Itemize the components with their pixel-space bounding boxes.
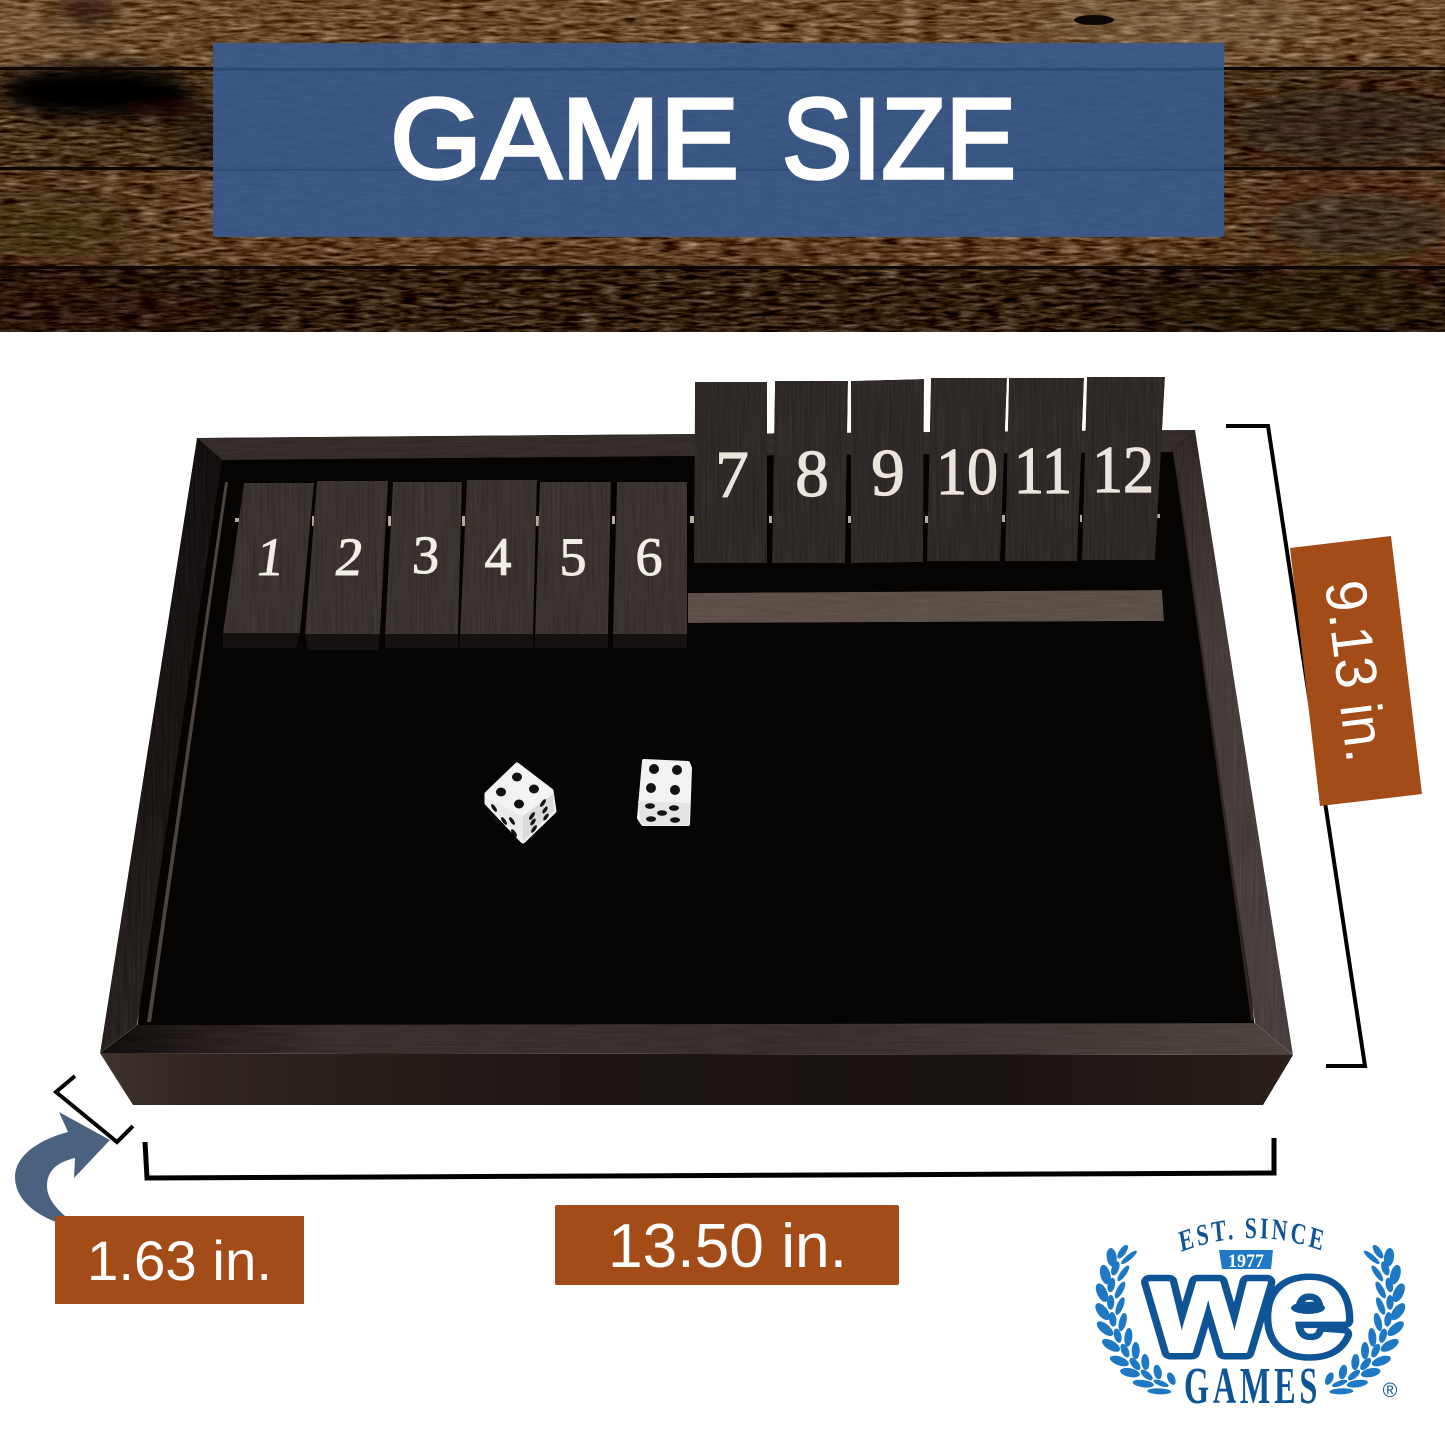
game board tray — [100, 430, 1293, 1105]
width dimension line — [145, 1138, 1274, 1178]
right rim — [1173, 430, 1293, 1055]
front rim top — [100, 1023, 1293, 1055]
burn mark — [0, 0, 225, 158]
logo registered mark: ® — [1383, 1380, 1398, 1402]
tile numbers: 2 — [332, 527, 367, 587]
label: width — [555, 1205, 899, 1285]
hinge pins — [235, 514, 1160, 526]
tile faces — [694, 377, 1165, 563]
wood plank header background — [0, 0, 1445, 332]
logo we mark: we — [1149, 1233, 1350, 1380]
front face — [100, 1053, 1293, 1105]
logo we mark: we — [1149, 1233, 1350, 1380]
tile numbers — [253, 525, 663, 587]
title banner — [213, 43, 1224, 237]
heading: SIZE — [782, 76, 1016, 203]
logo year ribbon — [1219, 1250, 1273, 1272]
tile numbers: 11 — [1014, 434, 1072, 508]
label: height — [1290, 536, 1422, 806]
inner wall highlights — [147, 482, 228, 1022]
label: height: 9.13 in. — [1312, 577, 1399, 765]
tile numbers: 6 — [636, 527, 662, 587]
label: width: 13.50 in. — [608, 1212, 847, 1281]
shelf bar — [688, 590, 1164, 623]
heading — [390, 76, 1016, 203]
felt floor — [166, 640, 1232, 1022]
top rim — [197, 430, 1195, 460]
tile numbers: 9 — [871, 436, 905, 510]
tile numbers — [715, 433, 1154, 512]
left die — [487, 765, 554, 841]
right die — [638, 761, 690, 825]
logo: WE Games — [1095, 1218, 1406, 1415]
logo laurel wreaths — [1093, 1243, 1408, 1395]
tile numbers: 3 — [411, 525, 441, 585]
logo games wordmark: GAMES — [1184, 1357, 1317, 1415]
tile numbers: 5 — [560, 527, 586, 587]
label: depth — [55, 1216, 304, 1304]
label: depth: 1.63 in. — [87, 1229, 272, 1292]
tile numbers: 12 — [1092, 433, 1154, 507]
depth dimension bracket — [56, 1076, 133, 1142]
arrow: curved pointer to depth bracket — [15, 1112, 110, 1222]
tile numbers: 1 — [253, 527, 288, 587]
tile numbers: 10 — [936, 435, 998, 509]
tile bases — [223, 633, 687, 650]
tile numbers: 8 — [795, 437, 829, 511]
heading: GAME — [390, 76, 739, 203]
tile numbers: 4 — [484, 527, 512, 587]
tile faces — [223, 480, 687, 634]
tray interior — [137, 430, 1255, 1030]
raised tiles 7 to 12 — [694, 377, 1165, 563]
tile numbers: 7 — [715, 438, 749, 512]
logo arc text: EST. SINCE — [1178, 1218, 1324, 1252]
left rim — [100, 438, 222, 1053]
shut tiles 1 to 6 — [223, 480, 687, 650]
height dimension line — [1226, 426, 1365, 1066]
logo year ribbon: 1977 — [1228, 1251, 1264, 1272]
